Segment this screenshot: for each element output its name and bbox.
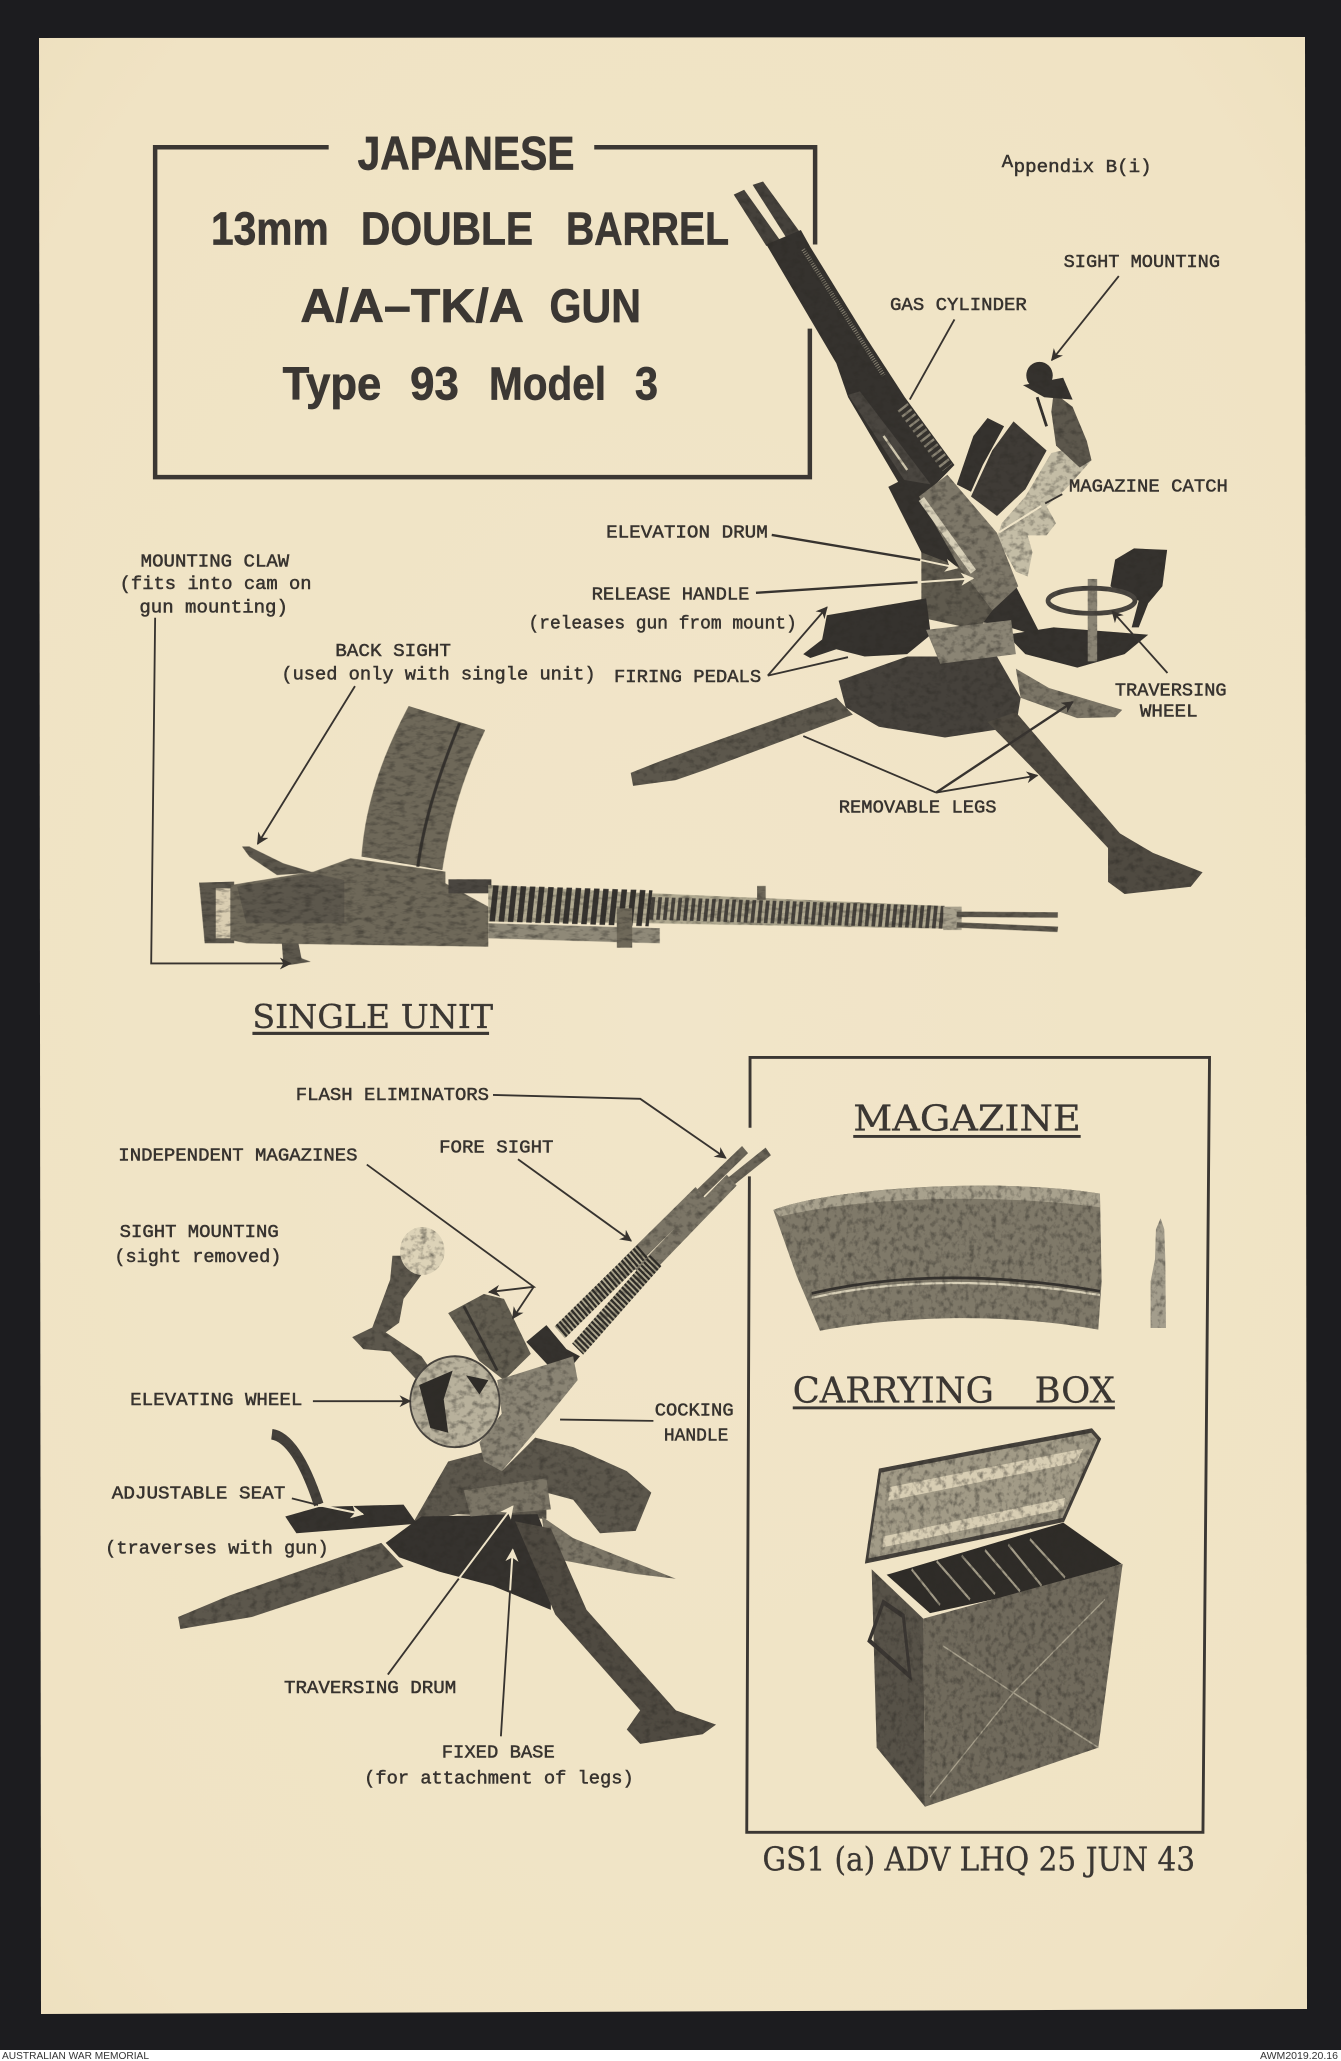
receiver light edge	[921, 499, 973, 572]
magazine rib	[418, 723, 459, 867]
right leg	[542, 1517, 676, 1579]
barrel spring lower	[902, 407, 947, 467]
traversing wheel	[1048, 588, 1135, 613]
arrow: independent magazines	[367, 1165, 534, 1292]
label: handle: HANDLE	[664, 1425, 728, 1447]
title Model: Model	[489, 358, 606, 410]
white caption strip	[0, 2050, 1341, 2061]
collar	[943, 907, 962, 930]
magazine	[773, 1186, 1102, 1331]
issue stamp: GS1 (a) ADV LHQ 25 JUN 43	[763, 1839, 1195, 1878]
sight disc	[400, 1227, 445, 1275]
sight stem	[1037, 397, 1047, 426]
label: adjustable seat: ADJUSTABLE SEAT	[112, 1482, 285, 1504]
sight arm	[352, 1256, 435, 1385]
flash eliminator right	[753, 182, 801, 238]
appendix text: ppendix B(i)	[1014, 156, 1152, 178]
text and frames	[105, 128, 1228, 1878]
tube band	[617, 908, 632, 948]
line: fixed base	[501, 1590, 510, 1736]
box front creases	[930, 1599, 1105, 1797]
label: cocking: COCKING	[655, 1400, 734, 1422]
line: firing pedals lower	[768, 657, 848, 676]
label: mounting claw: MOUNTING CLAW	[141, 551, 290, 573]
mid mount	[412, 1438, 651, 1533]
title 93: 93	[410, 358, 459, 410]
label: claw note 1: (fits into cam on	[120, 573, 312, 595]
mounting claw	[282, 943, 311, 965]
base	[839, 657, 1021, 737]
seat pedestal	[1006, 627, 1148, 668]
left leg	[178, 1543, 404, 1629]
label: independent magazines: INDEPENDENT MAGAZINES	[118, 1145, 358, 1167]
magazine rib	[464, 1306, 497, 1371]
wheel column	[1088, 579, 1097, 661]
turret plate	[464, 1478, 551, 1517]
title 3: 3	[635, 358, 658, 410]
arrow: back sight	[258, 686, 355, 844]
magazine rear	[957, 418, 1004, 492]
front leg	[515, 1521, 716, 1744]
panel frame: magazine and carrying box	[747, 1057, 1210, 1832]
barrels	[627, 1180, 732, 1275]
cartridge	[1151, 1218, 1166, 1328]
magazine text: MAGAZINE	[853, 1098, 1081, 1139]
title	[211, 128, 729, 410]
receiver	[919, 475, 1018, 610]
line: gas cylinder	[910, 319, 954, 400]
label: traversing: TRAVERSING	[1115, 679, 1227, 701]
label: sight mounting: SIGHT MOUNTING	[1064, 251, 1220, 273]
arrow: fixed base white	[510, 1550, 513, 1590]
line: elevation drum	[772, 535, 920, 560]
mount post	[921, 552, 992, 630]
spring base	[488, 885, 944, 929]
receiver	[479, 1356, 578, 1471]
cradle strip	[848, 391, 931, 492]
flash eliminators	[698, 1150, 768, 1195]
magazine	[361, 706, 485, 870]
flash eliminator left	[734, 190, 780, 246]
label: gas cylinder: GAS CYLINDER	[890, 294, 1027, 316]
label: fixed base: FIXED BASE	[442, 1741, 555, 1763]
line: adjustable seat	[292, 1498, 318, 1505]
heading: single unit	[252, 997, 493, 1036]
label: magazine catch: MAGAZINE CATCH	[1069, 476, 1228, 498]
photo: double barrel gun, rear view	[178, 1150, 768, 1744]
label: elevating wheel: ELEVATING WHEEL	[130, 1389, 302, 1411]
springs	[560, 1251, 656, 1349]
label: wheel: WHEEL	[1140, 700, 1198, 722]
arrow: traversing wheel	[1112, 611, 1167, 673]
sight base	[1023, 378, 1073, 400]
flash eliminators	[957, 914, 1058, 929]
title 13mm: 13mm	[211, 202, 329, 254]
carrying text: CARRYING	[793, 1370, 994, 1411]
sight mounting	[1051, 392, 1092, 467]
title line 1: JAPANESE	[358, 128, 575, 181]
photo: single unit gun	[199, 706, 1058, 965]
label: traversing drum: TRAVERSING DRUM	[284, 1677, 456, 1699]
magazines	[448, 1294, 531, 1380]
recoil spring rear	[491, 903, 651, 908]
line: release handle	[756, 582, 918, 593]
title BARREL: BARREL	[566, 202, 729, 254]
seat base	[285, 1505, 417, 1533]
box text: BOX	[1035, 1370, 1116, 1411]
label: sight removed: (sight removed)	[114, 1246, 281, 1268]
box handle	[869, 1602, 910, 1676]
receiver	[231, 858, 488, 947]
label: fore sight: FORE SIGHT	[439, 1137, 553, 1159]
nut	[448, 879, 491, 893]
magazine underline	[853, 1135, 1081, 1138]
arrows: firing pedals	[768, 607, 827, 676]
receiver rear dark	[237, 873, 344, 923]
sight	[1026, 362, 1053, 389]
title Type: Type	[283, 358, 381, 410]
line: traversing drum	[388, 1579, 459, 1675]
base	[386, 1514, 551, 1610]
label: release handle note: (releases gun from mount)	[529, 612, 797, 634]
magazine front	[971, 421, 1047, 516]
box front	[923, 1564, 1123, 1807]
front sight	[757, 886, 766, 900]
label: removable legs: REMOVABLE LEGS	[839, 796, 997, 818]
recoil spring front	[651, 908, 944, 917]
lid lower band	[883, 1498, 1065, 1547]
arrow: independent magazines second	[513, 1287, 534, 1318]
back plate	[199, 882, 234, 943]
title DOUBLE: DOUBLE	[361, 202, 533, 254]
heading underline	[252, 1032, 489, 1035]
lid inner band	[888, 1449, 1083, 1501]
arrow: elevating wheel	[313, 1400, 410, 1402]
arrow: elevation drum white	[920, 560, 957, 568]
arrow: adjustable seat white	[318, 1505, 363, 1514]
leader lines and arrows	[151, 276, 1167, 1736]
arrows: removable legs	[803, 736, 1037, 793]
heading: carrying box	[793, 1370, 1116, 1411]
label: firing pedals: FIRING PEDALS	[614, 666, 761, 688]
label: flash eliminators: FLASH ELIMINATORS	[296, 1084, 489, 1106]
tray dividers	[912, 1539, 1065, 1605]
dark body	[888, 480, 1042, 637]
front leg	[988, 712, 1203, 894]
label: back sight note: (used only with single unit)	[281, 664, 596, 686]
line: cocking handle	[560, 1420, 653, 1421]
arrow: flash eliminators	[493, 1095, 726, 1158]
seat back	[272, 1434, 319, 1505]
arrow: release handle white	[918, 578, 973, 582]
label: attachment note: (for attachment of legs)	[364, 1768, 634, 1790]
magazine light rib	[812, 1283, 1100, 1298]
label: sight mounting: SIGHT MOUNTING	[120, 1221, 279, 1243]
arrow: traversing drum white	[459, 1506, 513, 1579]
line: magazine catch white	[999, 506, 1041, 532]
turret ring	[926, 620, 1016, 664]
pedal cluster	[803, 598, 931, 658]
appendix initial: A	[1002, 151, 1014, 173]
label: back sight: BACK SIGHT	[335, 640, 451, 662]
wheel blotches	[419, 1371, 488, 1433]
seat	[1110, 548, 1167, 627]
arrow: fore sight	[518, 1159, 631, 1241]
back plate opening	[216, 888, 230, 938]
photo: double barrel gun, side view	[631, 182, 1203, 894]
rear leg	[1016, 669, 1122, 718]
box lid	[867, 1431, 1099, 1561]
label: elevation drum: ELEVATION DRUM	[606, 522, 768, 544]
label: claw note 2: gun mounting)	[139, 597, 288, 619]
box side	[872, 1569, 925, 1807]
label: traverses with gun: (traverses with gun)	[105, 1538, 329, 1560]
arrow: mounting claw	[151, 618, 291, 963]
carrying box underline	[793, 1406, 1115, 1409]
title A/A-TK/A: A/A–TK/A	[300, 280, 524, 333]
magazine top band	[773, 1186, 1100, 1217]
label: release handle: RELEASE HANDLE	[592, 583, 749, 605]
receiver top bolt	[526, 1325, 580, 1375]
back sight	[242, 847, 314, 875]
barrels	[766, 230, 954, 489]
arrow: removable legs rear	[936, 702, 1073, 793]
line: magazine catch	[1045, 494, 1062, 503]
elevation housing	[997, 446, 1092, 577]
arrow: sight mounting	[1052, 276, 1119, 360]
photos: magazine, cartridge and carrying box	[773, 1186, 1166, 1807]
barrel spring right	[803, 249, 884, 375]
box trays	[887, 1523, 1122, 1613]
spring base	[560, 1251, 656, 1349]
cradle slot	[884, 436, 907, 470]
elevating wheel	[410, 1356, 500, 1447]
appendix note	[1002, 151, 1152, 178]
title box frame	[155, 147, 815, 477]
magazine ribs	[812, 1278, 1100, 1293]
gas tube	[488, 923, 660, 943]
heading text: SINGLE UNIT	[252, 997, 493, 1036]
left leg	[631, 698, 853, 786]
title GUN: GUN	[550, 280, 641, 333]
